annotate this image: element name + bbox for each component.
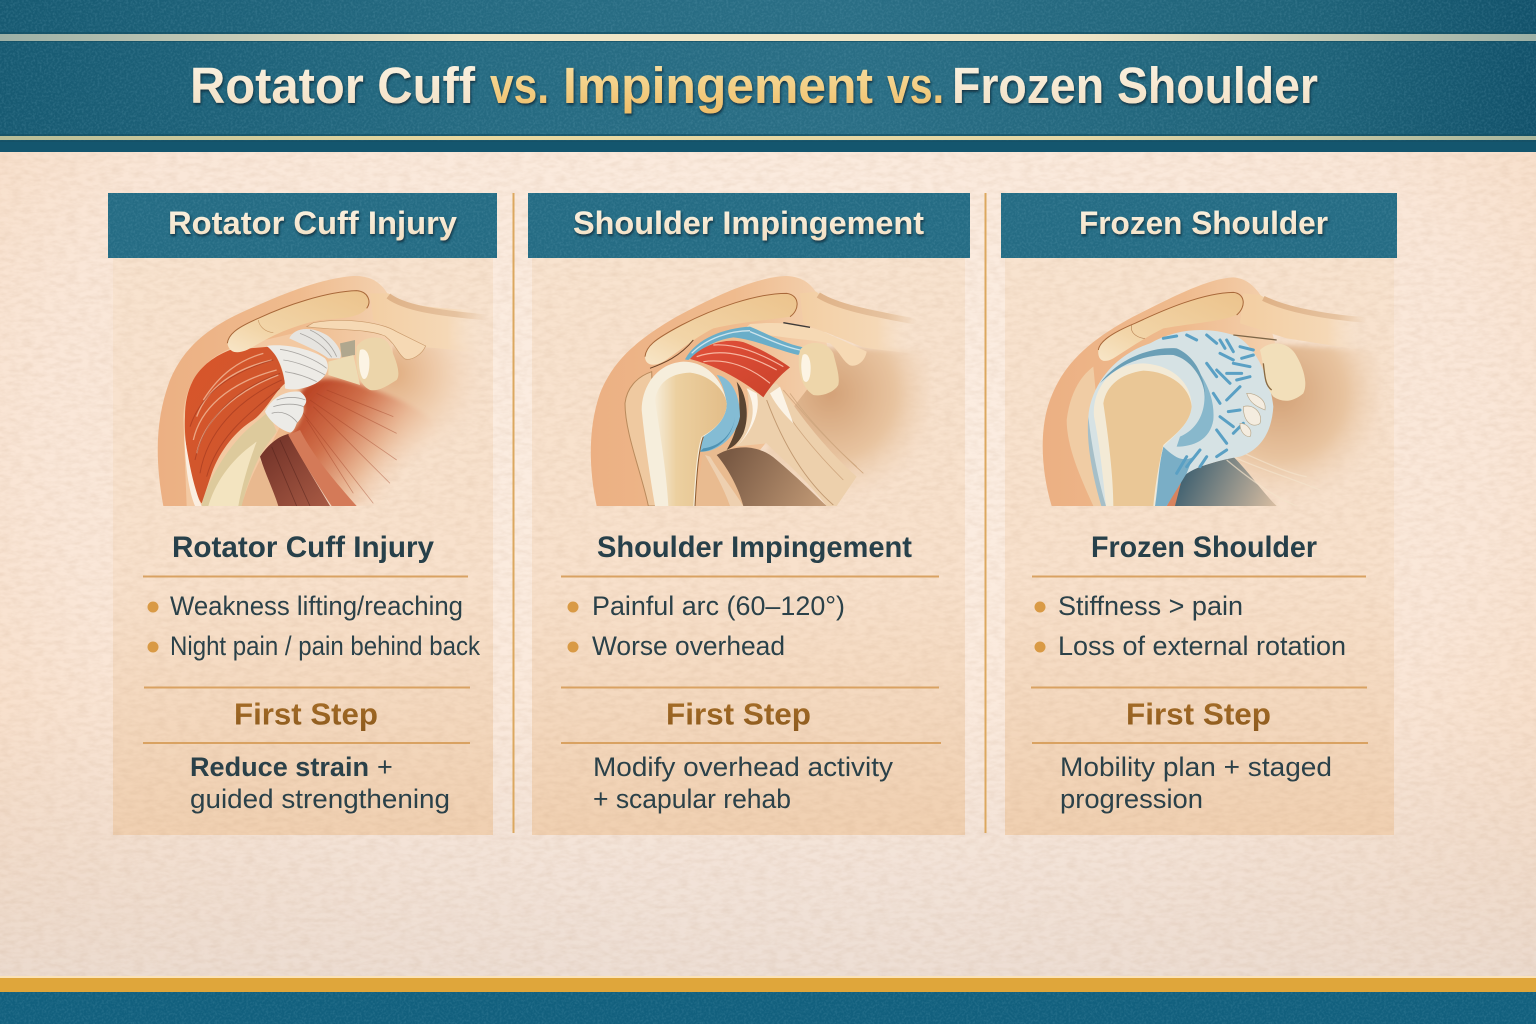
symptoms list: Loss of external rotation	[1058, 631, 1346, 661]
heading bar	[108, 193, 497, 258]
title	[190, 57, 1318, 114]
panel background	[1005, 258, 1394, 835]
symptoms list	[568, 591, 845, 661]
footer band	[0, 976, 1536, 1024]
first step text: guided strengthening	[190, 784, 450, 814]
title: Frozen Shoulder	[952, 57, 1318, 114]
condition name: Frozen Shoulder	[1091, 531, 1317, 564]
panel background	[532, 258, 965, 835]
first step heading: First Step	[1126, 696, 1271, 732]
panel background	[113, 258, 493, 835]
symptoms list: Stiffness > pain	[1058, 591, 1243, 621]
symptoms list	[148, 591, 480, 661]
first step text	[593, 752, 894, 814]
column divider right	[984, 193, 986, 833]
panel: frozen shoulder	[1001, 193, 1397, 835]
first step text: Mobility plan + staged	[1060, 752, 1332, 782]
first step text	[1060, 752, 1332, 814]
illustration: impingement	[591, 276, 930, 506]
header banner	[0, 0, 1536, 152]
heading bar	[528, 193, 970, 258]
heading bar: Shoulder Impingement	[573, 205, 924, 241]
first step text: +	[377, 752, 393, 782]
first step heading: First Step	[666, 696, 811, 732]
symptoms list	[1034, 591, 1346, 661]
title: Rotator Cuff	[190, 57, 476, 114]
panel: rotator cuff injury	[108, 193, 497, 835]
panel: shoulder impingement	[528, 193, 970, 835]
symptoms list: Night pain / pain behind back	[170, 631, 480, 661]
illustration: frozen shoulder	[1043, 277, 1380, 506]
title: vs.	[887, 57, 944, 114]
condition name: Shoulder Impingement	[597, 531, 912, 564]
condition name: Rotator Cuff Injury	[172, 531, 434, 564]
symptoms list: Worse overhead	[592, 631, 785, 661]
first step text: Reduce strain	[190, 752, 369, 782]
heading bar: Frozen Shoulder	[1079, 205, 1328, 241]
first step text: progression	[1060, 784, 1203, 814]
heading bar: Rotator Cuff Injury	[168, 205, 457, 241]
first step text	[190, 752, 450, 814]
title: vs.	[490, 57, 549, 114]
illustration: torn rotator cuff	[158, 276, 487, 506]
symptoms list: Weakness lifting/reaching	[170, 591, 463, 621]
column divider left	[512, 193, 514, 833]
first step heading: First Step	[234, 696, 378, 732]
symptoms list: Painful arc (60–120°)	[592, 591, 845, 621]
heading bar	[1001, 193, 1397, 258]
title: Impingement	[563, 57, 873, 114]
first step text: Modify overhead activity	[593, 752, 894, 782]
first step text: + scapular rehab	[593, 784, 791, 814]
